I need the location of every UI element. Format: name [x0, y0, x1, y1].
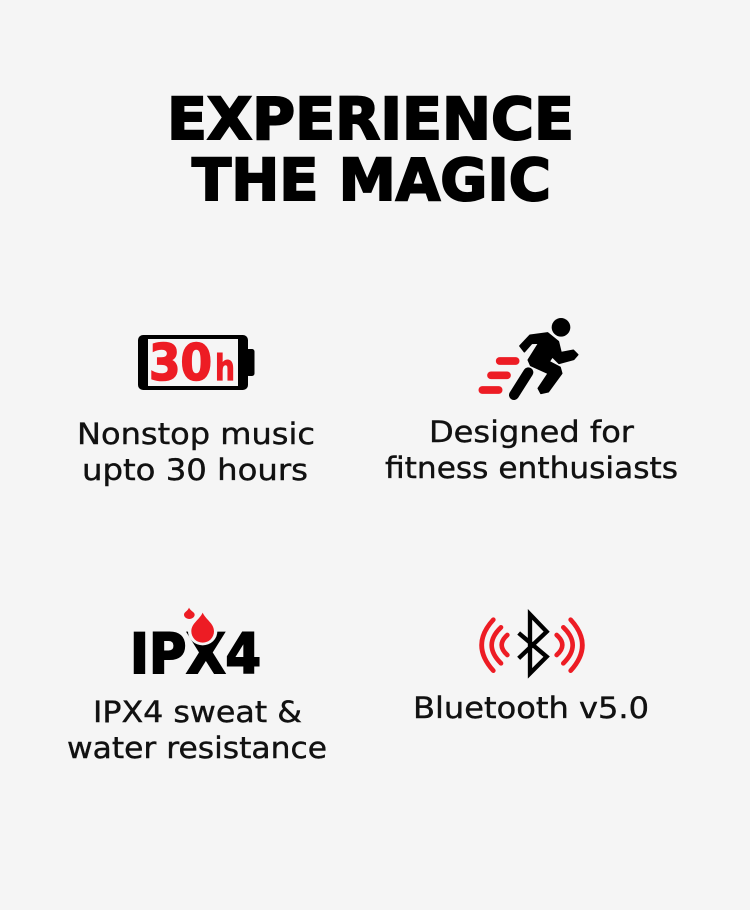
text: battery caption: upto 30 hours	[82, 453, 308, 487]
text: fitness caption: Designed for	[429, 415, 634, 449]
icon: battery 30h	[138, 334, 254, 392]
text: IPX4 caption: IPX4 sweat &	[93, 695, 302, 729]
icon: battery 30h: h	[215, 348, 235, 389]
icon: battery 30h: 30	[149, 334, 212, 392]
text: IPX4 caption: water resistance	[67, 731, 327, 765]
text: fitness caption	[385, 415, 678, 485]
text: battery caption: Nonstop music	[77, 417, 315, 451]
icon: runner	[482, 318, 578, 395]
text: fitness caption: fitness enthusiasts	[385, 451, 678, 485]
title	[167, 85, 574, 214]
title: THE MAGIC	[192, 146, 551, 214]
text: IPX4 caption	[67, 695, 327, 765]
icon: IPX4 with drops: IPX4	[130, 622, 261, 686]
text: bluetooth caption: Bluetooth v5.0	[413, 691, 649, 725]
title: EXPERIENCE	[167, 85, 574, 153]
icon: bluetooth waves	[482, 614, 582, 673]
text: battery caption	[77, 417, 315, 487]
